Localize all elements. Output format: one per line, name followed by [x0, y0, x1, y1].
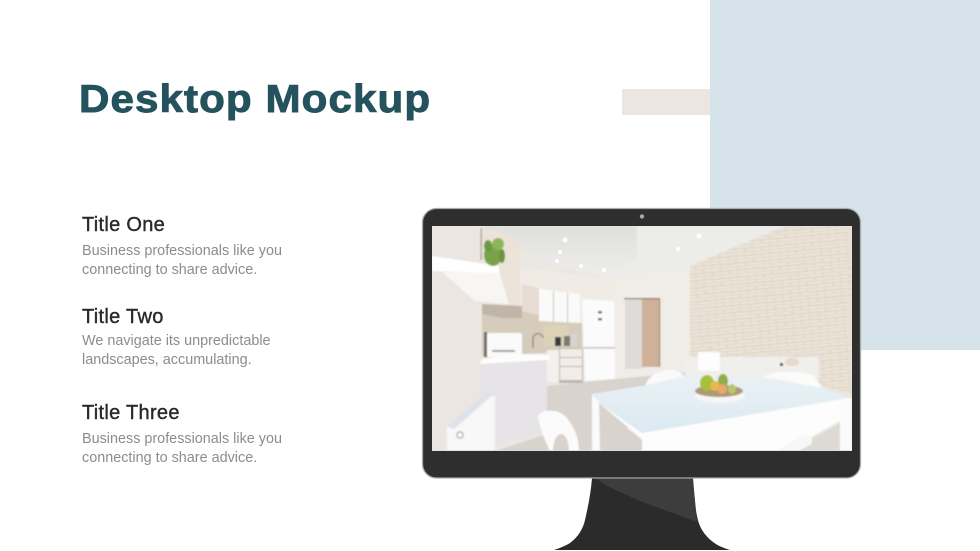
monitor stand — [554, 478, 730, 550]
title: Desktop Mockup — [79, 78, 431, 120]
text block: title one — [82, 214, 282, 278]
front chair — [538, 411, 579, 451]
floor — [495, 372, 690, 451]
wall shelf — [442, 272, 509, 304]
screen bottom highlight — [432, 450, 852, 451]
backsplash — [482, 312, 582, 356]
hanging plant — [484, 238, 505, 266]
text block: title one: connecting to share advice. — [82, 262, 257, 278]
counter top — [480, 354, 549, 364]
dining table — [592, 376, 852, 451]
fruit bowl — [695, 374, 745, 403]
text block: title three: connecting to share advice. — [82, 450, 257, 466]
desktop monitor mockup — [422, 208, 862, 550]
wall cabinets — [539, 289, 580, 323]
text block: title three — [82, 402, 282, 466]
ceiling spot lights — [555, 234, 702, 272]
text block: title three: Business professionals like you — [82, 431, 282, 447]
microwave — [484, 332, 522, 357]
brick wall — [690, 226, 852, 394]
panel: pale blue background block — [710, 0, 980, 350]
radiator — [447, 392, 495, 450]
accent: beige bar — [622, 89, 710, 115]
text block: title two: landscapes, accumulating. — [82, 352, 252, 368]
counter appliances — [533, 334, 577, 348]
sofa — [685, 352, 819, 380]
curved column — [482, 228, 520, 306]
screen photo: white kitchen and dining room — [432, 226, 852, 451]
back wall with door — [614, 274, 684, 378]
text block: title one: Title One — [82, 214, 165, 236]
webcam — [640, 214, 644, 219]
monitor body — [422, 208, 860, 478]
text block: title three: Title Three — [82, 402, 180, 424]
text block: title one: Business professionals like you — [82, 243, 282, 259]
text block: title two: Title Two — [82, 306, 164, 328]
back chairs — [645, 370, 822, 388]
refrigerator — [582, 299, 615, 381]
left wall — [432, 226, 482, 451]
base cabinets and drawers — [547, 348, 583, 383]
text block: title two — [82, 306, 271, 368]
ceiling — [485, 226, 636, 277]
kitchen island — [480, 360, 547, 444]
kitchen back wall — [520, 268, 612, 326]
text block: title two: We navigate its unpredictable — [82, 332, 271, 348]
